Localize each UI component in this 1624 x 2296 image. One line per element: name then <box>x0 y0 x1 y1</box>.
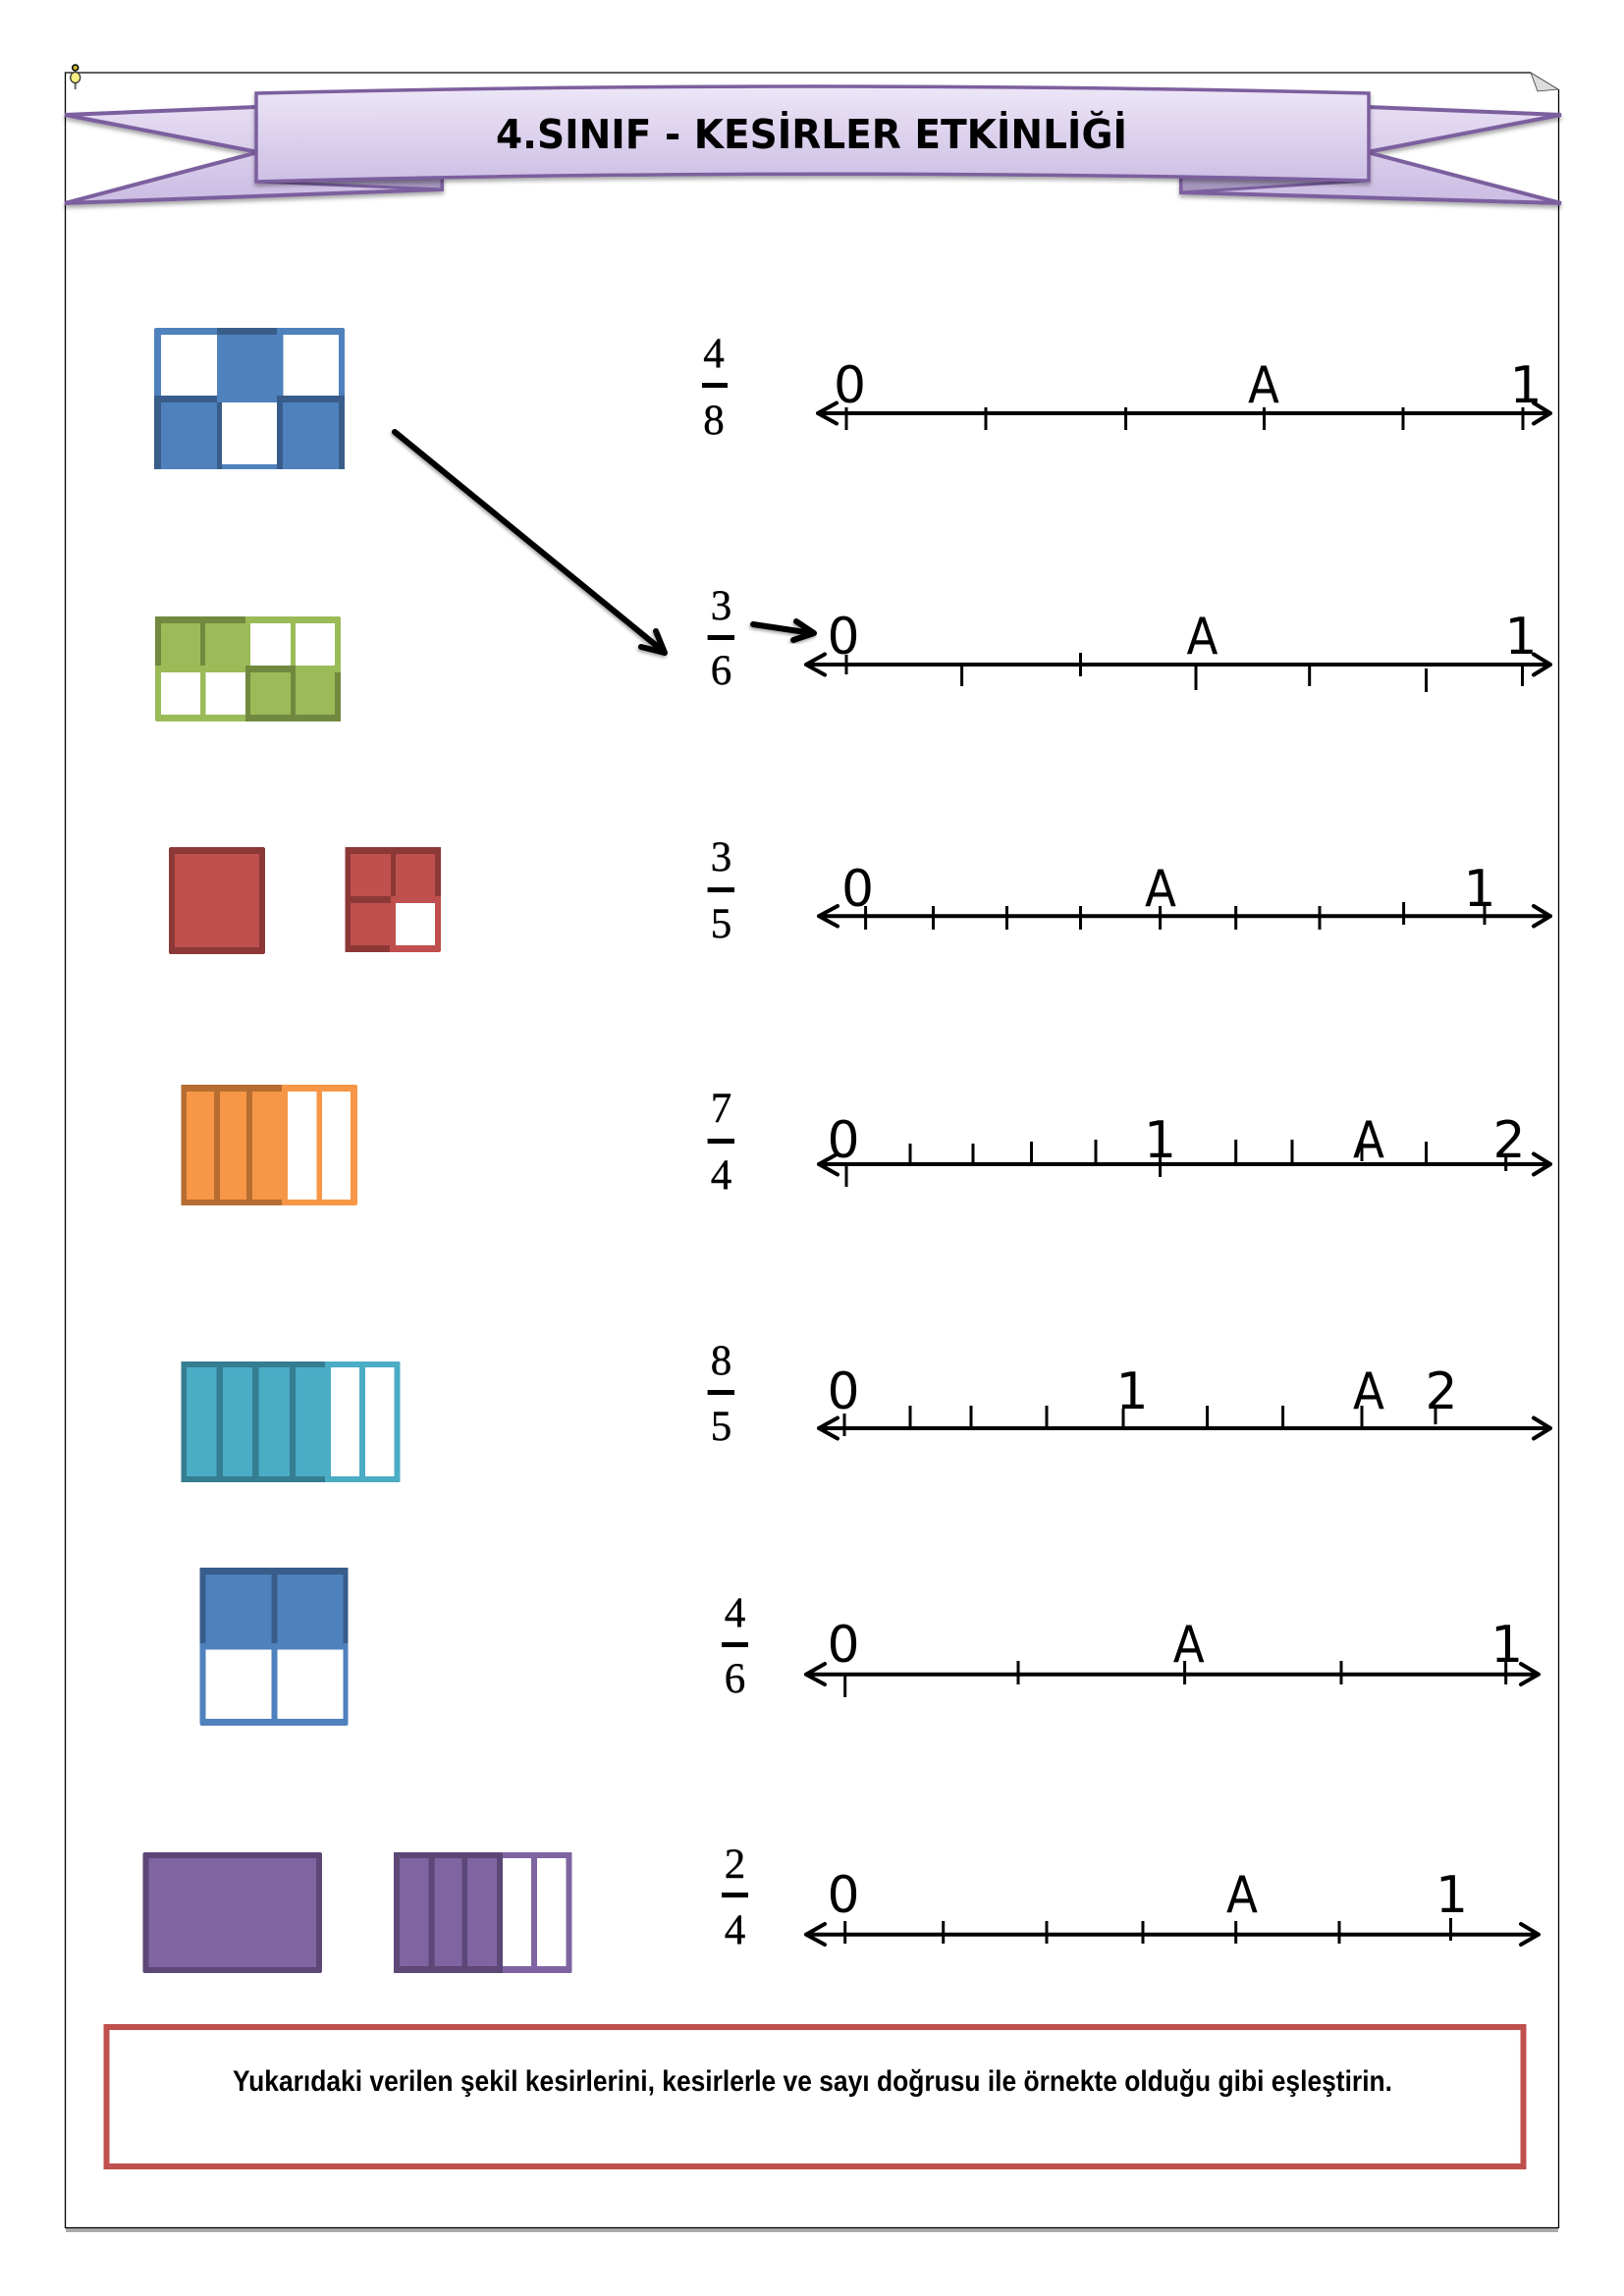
number line 3: 1 <box>1463 860 1496 919</box>
banner main ribbon <box>256 86 1369 182</box>
fraction 2/4: 4 <box>725 1907 745 1953</box>
shape 7: purple whole rectangle <box>143 1852 322 1973</box>
number line 6: 0 <box>827 1616 860 1675</box>
number line 2: A <box>1186 608 1218 667</box>
shape 1: blue 3x2 grid <box>154 328 345 469</box>
icon: page curl <box>1531 73 1558 91</box>
fraction 4/6: 6 <box>725 1656 745 1702</box>
title: 4.SINIF - KESİRLER ETKİNLİĞİ <box>496 111 1127 158</box>
number line 1: 1 <box>1509 356 1543 415</box>
number line 4: 2 <box>1492 1111 1526 1170</box>
number line 7: 1 <box>1435 1866 1468 1925</box>
instruction box <box>106 2027 1524 2166</box>
fraction 3/5 <box>708 834 734 947</box>
instruction text: Yukarıdaki verilen şekil kesirlerini, kesirlerle ve sayı doğrusu ile örnekte olduğu gibi eşleştirin. <box>233 2065 1392 2098</box>
number line 2: 0 <box>827 608 860 667</box>
number line 4: 0 <box>827 1111 860 1170</box>
fraction 4/8: 4 <box>703 331 725 377</box>
number line 3: A <box>1145 860 1176 919</box>
number line 6: 1 <box>1490 1616 1523 1675</box>
number line 4: A <box>1353 1111 1384 1170</box>
fraction 8/5 <box>708 1338 734 1450</box>
number line 1: A <box>1248 356 1279 415</box>
number line 6 <box>806 1616 1539 1697</box>
fraction 2/4: 2 <box>725 1842 745 1888</box>
number line 7: A <box>1226 1866 1258 1925</box>
banner left fold <box>256 178 442 189</box>
number line 2: 1 <box>1504 608 1538 667</box>
fraction 4/6 <box>722 1590 748 1702</box>
number line 6: A <box>1173 1616 1205 1675</box>
shape 7: purple 5 columns <box>394 1852 572 1973</box>
fraction 3/6 <box>708 583 734 694</box>
fraction 4/6: 4 <box>725 1590 745 1636</box>
fraction 3/5: 5 <box>711 901 731 947</box>
number line 7 <box>806 1866 1539 1945</box>
fraction 7/4: 7 <box>711 1086 731 1132</box>
number line 3: 0 <box>841 860 874 919</box>
arrow: fraction to number line <box>753 621 814 640</box>
number line 5: A <box>1353 1362 1384 1421</box>
number line 4: 1 <box>1144 1111 1176 1170</box>
fraction 8/5: 5 <box>711 1404 731 1450</box>
fraction 4/8: 8 <box>703 398 725 444</box>
shape 5: teal 6 columns <box>181 1362 401 1482</box>
number line 7: 0 <box>827 1866 860 1925</box>
fraction 3/6: 6 <box>711 648 731 694</box>
fraction 4/8 <box>702 331 728 444</box>
number line 2 <box>806 608 1550 692</box>
fraction 3/5: 3 <box>711 834 731 881</box>
shape 2: green 4x2 grid <box>155 616 341 721</box>
number line 1 <box>818 356 1550 430</box>
shape 4: orange 5 columns <box>181 1085 357 1205</box>
shape 3: red whole square <box>169 847 265 954</box>
fraction 8/5: 8 <box>711 1338 731 1384</box>
number line 1: 0 <box>834 356 866 415</box>
number line 5 <box>819 1362 1550 1439</box>
arrow: shape to fraction <box>395 432 665 653</box>
banner left tail <box>65 107 442 203</box>
shape 3: red 2x2 grid <box>346 847 441 952</box>
number line 5: 2 <box>1425 1362 1458 1421</box>
icon: pin <box>71 65 81 89</box>
number line 3 <box>819 860 1550 930</box>
shape 6: blue 2x2 grid <box>200 1568 348 1726</box>
fraction 3/6: 3 <box>711 583 731 629</box>
number line 5: 0 <box>827 1362 860 1421</box>
banner right fold <box>1181 177 1368 192</box>
number line 5: 1 <box>1115 1362 1149 1421</box>
fraction 7/4 <box>708 1086 734 1199</box>
number line 4 <box>819 1111 1550 1187</box>
banner right tail <box>1181 107 1561 203</box>
fraction 2/4 <box>722 1842 748 1953</box>
title banner <box>65 86 1561 203</box>
fraction 7/4: 4 <box>711 1152 731 1199</box>
